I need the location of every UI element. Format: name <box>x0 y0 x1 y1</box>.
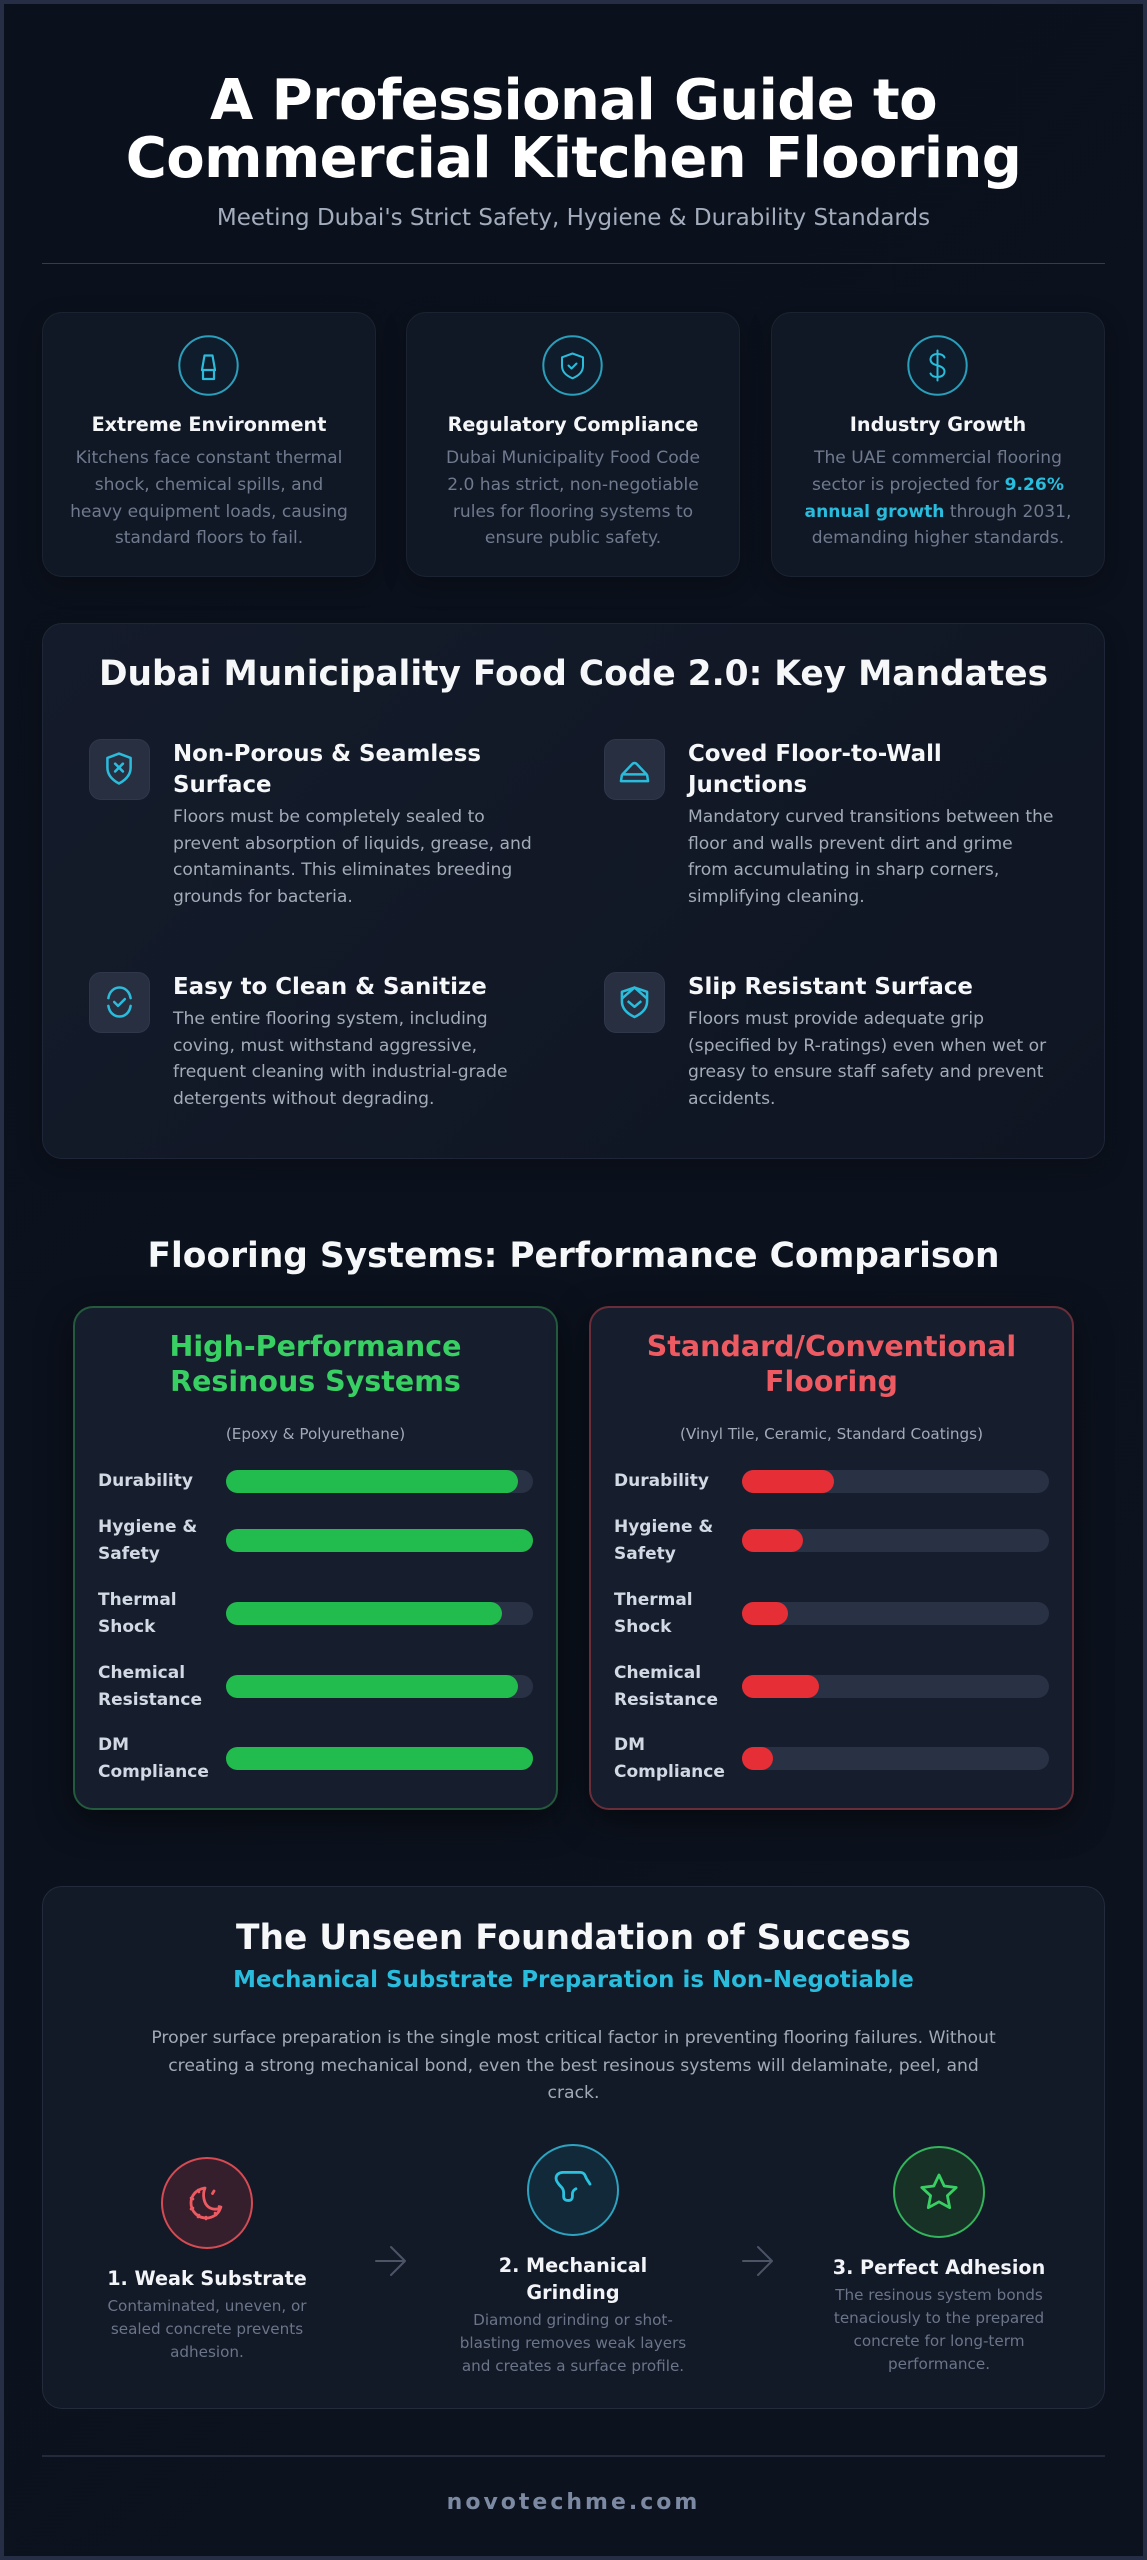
mandate: easy to clean <box>89 972 508 1109</box>
text <box>173 807 532 907</box>
heading: Industry Growth <box>850 413 1026 436</box>
panel subtitle: (Vinyl Tile, Ceramic, Standard Coatings) <box>680 1425 983 1443</box>
text: (specified by R-ratings) even when wet or <box>688 1036 1046 1056</box>
heading: Dubai Municipality Food Code 2.0: Key Mandates <box>99 654 1048 694</box>
row: compliance <box>614 1735 1049 1782</box>
text: contaminants. This eliminates breeding <box>173 860 512 880</box>
row: thermal: Thermal <box>98 1590 177 1610</box>
panel title: Standard/Conventional <box>647 1330 1016 1362</box>
text: demanding higher standards. <box>812 528 1064 548</box>
row: hygiene <box>614 1517 1049 1564</box>
icon: shield check <box>542 335 603 396</box>
icon: dollar <box>907 335 968 396</box>
text: from accumulating in sharp corners, <box>688 860 999 880</box>
panel title: Flooring <box>765 1364 898 1398</box>
text: Kitchens face constant thermal <box>76 448 342 468</box>
row: hygiene: Safety <box>98 1544 160 1564</box>
text <box>688 807 1053 907</box>
row: hygiene: Hygiene & <box>98 1517 197 1537</box>
heading: Surface <box>173 772 272 798</box>
text <box>688 1009 1046 1109</box>
row: chemical <box>98 1663 533 1710</box>
icon: grinder <box>527 2144 619 2236</box>
text: frequent cleaning with industrial-grade <box>173 1062 508 1082</box>
mandate: coved <box>604 739 1053 907</box>
panel title <box>647 1330 1016 1398</box>
step text: The resinous system bonds <box>835 2286 1043 2304</box>
intro text <box>151 2028 996 2103</box>
panel title: High-Performance <box>170 1330 461 1362</box>
text: ensure public safety. <box>485 528 661 548</box>
step text <box>460 2311 686 2375</box>
text: detergents without degrading. <box>173 1089 434 1109</box>
heading: Easy to Clean & Sanitize <box>173 974 487 1000</box>
step text: Diamond grinding or shot- <box>473 2311 673 2329</box>
heading: The Unseen Foundation of Success <box>236 1918 911 1958</box>
step text: tenaciously to the prepared <box>834 2309 1044 2327</box>
text: grounds for bacteria. <box>173 887 353 907</box>
text: Mandatory curved transitions between the <box>688 807 1053 827</box>
panel title: Resinous Systems <box>170 1364 461 1398</box>
intro text: Proper surface preparation is the single most critical factor in preventing flooring failures. Without <box>151 2028 996 2048</box>
panel: industry growth <box>771 312 1105 577</box>
title: Commercial Kitchen Flooring <box>126 126 1021 190</box>
panel: resinous systems <box>73 1306 558 1810</box>
row: thermal: Shock <box>614 1617 671 1637</box>
panel: conventional flooring <box>589 1306 1074 1810</box>
text: sector is projected for 9.26% <box>812 475 1064 495</box>
row: chemical: Chemical <box>98 1663 185 1683</box>
text: rules for flooring systems to <box>453 502 693 522</box>
text: heavy equipment loads, causing <box>70 502 348 522</box>
text: floor and walls prevent dirt and grime <box>688 834 1013 854</box>
heading: comparison: Flooring Systems: Performance Comparison <box>148 1236 999 1276</box>
intro text: crack. <box>548 2083 599 2103</box>
row: thermal <box>98 1590 533 1637</box>
text <box>70 448 348 548</box>
text: standard floors to fail. <box>115 528 303 548</box>
mandate: non-porous <box>89 739 532 907</box>
row: hygiene: Safety <box>614 1544 676 1564</box>
heading: Regulatory Compliance <box>448 413 698 436</box>
text: shock, chemical spills, and <box>95 475 323 495</box>
panel: extreme environment <box>42 312 376 577</box>
step 1 <box>107 2157 307 2361</box>
step text: performance. <box>888 2355 990 2373</box>
text: Floors must provide adequate grip <box>688 1009 984 1029</box>
step text: and creates a surface profile. <box>462 2357 684 2375</box>
icon: cove <box>604 739 665 800</box>
step title: 2. Mechanical <box>499 2254 647 2276</box>
icon: star <box>893 2146 985 2238</box>
text: coving, must withstand aggressive, <box>173 1036 477 1056</box>
text <box>805 448 1071 548</box>
row: thermal: Shock <box>98 1617 155 1637</box>
row: hygiene <box>98 1517 533 1564</box>
row: durability: Durability <box>98 1470 193 1490</box>
mandate: slip resistant <box>604 972 1046 1109</box>
step text: concrete for long-term <box>853 2332 1025 2350</box>
text: prevent absorption of liquids, grease, and <box>173 834 532 854</box>
row: compliance: DM <box>614 1735 645 1755</box>
heading <box>173 741 481 798</box>
arrow <box>742 2246 773 2276</box>
icon: sanitize cycle <box>89 972 150 1033</box>
intro text: creating a strong mechanical bond, even the best resinous systems will delaminate, peel, and <box>168 2056 979 2076</box>
text: Dubai Municipality Food Code <box>446 448 700 468</box>
step text: blasting removes weak layers <box>460 2334 686 2352</box>
text: 2.0 has strict, non-negotiable <box>447 475 699 495</box>
icon: weak substrate <box>161 2157 253 2249</box>
row: chemical: Chemical <box>614 1663 701 1683</box>
row: thermal: Thermal <box>614 1590 693 1610</box>
step title <box>499 2254 647 2304</box>
text <box>172 1009 508 1109</box>
panel subtitle: (Epoxy & Polyurethane) <box>226 1425 405 1443</box>
text: simplifying cleaning. <box>688 887 865 907</box>
row: compliance: Compliance <box>98 1762 209 1782</box>
text: greasy to ensure staff safety and prevent <box>688 1062 1043 1082</box>
heading <box>686 741 942 798</box>
panel: key mandates <box>42 623 1105 1159</box>
title <box>126 68 1021 190</box>
step text: adhesion. <box>170 2343 244 2361</box>
panel: substrate preparation <box>42 1886 1105 2409</box>
text <box>446 448 700 548</box>
row: chemical: Resistance <box>98 1690 202 1710</box>
panel: regulatory compliance <box>406 312 740 577</box>
row: durability <box>98 1470 533 1493</box>
subheading: Mechanical Substrate Preparation is Non-Negotiable <box>233 1967 914 1993</box>
row: thermal <box>614 1590 1049 1637</box>
icon: kitchen bell <box>178 335 239 396</box>
step text <box>107 2297 307 2361</box>
text: The UAE commercial flooring <box>814 448 1062 468</box>
icon: shield grip <box>604 972 665 1033</box>
text: accidents. <box>688 1089 776 1109</box>
row: durability <box>614 1470 1049 1493</box>
step title: 1. Weak Substrate <box>107 2267 307 2290</box>
step text <box>819 2284 1059 2376</box>
text: Floors must be completely sealed to <box>173 807 485 827</box>
row: compliance: Compliance <box>614 1762 725 1782</box>
heading: Coved Floor-to-Wall <box>688 741 942 767</box>
heading: Non-Porous & Seamless <box>173 741 481 767</box>
panel title <box>170 1330 461 1398</box>
step 2 <box>460 2144 686 2375</box>
heading: Extreme Environment <box>92 413 326 436</box>
arrow <box>375 2246 406 2276</box>
step title: 3. Perfect Adhesion <box>833 2256 1045 2279</box>
title: A Professional Guide to <box>210 68 937 133</box>
text: annual growth through 2031, <box>805 502 1071 522</box>
row: chemical: Resistance <box>614 1690 718 1710</box>
row: hygiene: Hygiene & <box>614 1517 713 1537</box>
icon: shield x <box>89 739 150 800</box>
row: compliance: DM <box>98 1735 129 1755</box>
row: durability: Durability <box>614 1470 709 1490</box>
text: The entire flooring system, including <box>173 1009 488 1029</box>
step title: Grinding <box>526 2280 620 2304</box>
step text: sealed concrete prevents <box>111 2320 303 2338</box>
footer: novotechme.com <box>447 2490 700 2515</box>
step 3 <box>833 2146 1045 2373</box>
step text: Contaminated, uneven, or <box>107 2297 307 2315</box>
row: chemical <box>614 1663 1049 1710</box>
subtitle: Meeting Dubai's Strict Safety, Hygiene & Durability Standards <box>217 205 930 231</box>
heading: Junctions <box>688 772 807 798</box>
row: compliance <box>98 1735 533 1782</box>
heading: Slip Resistant Surface <box>688 974 973 1000</box>
